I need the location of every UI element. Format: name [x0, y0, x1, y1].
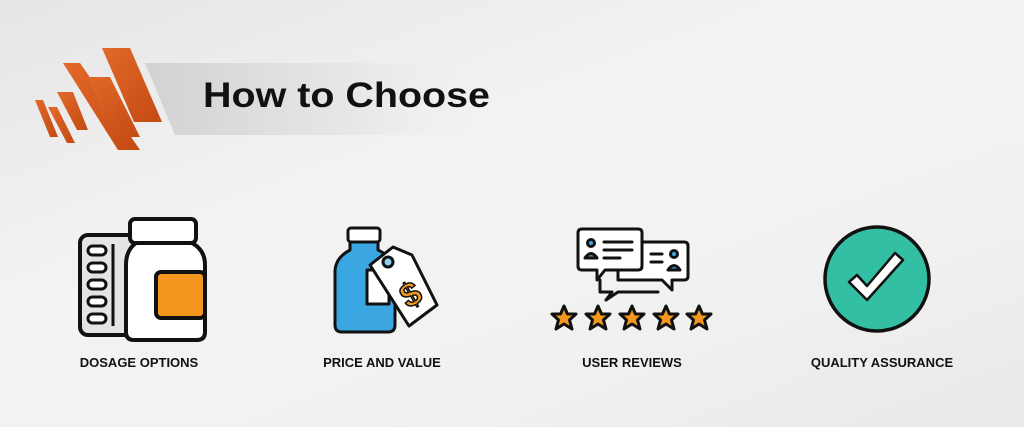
icon: price and value: $ — [393, 274, 429, 316]
icon: price and value — [335, 228, 437, 332]
label: dosage options: DOSAGE OPTIONS — [80, 355, 199, 370]
title band — [145, 63, 500, 135]
label: quality assurance: QUALITY ASSURANCE — [811, 355, 953, 370]
logo: orange bars — [35, 48, 162, 150]
icon: five stars — [552, 306, 711, 329]
label: price and value: PRICE AND VALUE — [323, 355, 441, 370]
title: How to Choose — [203, 76, 490, 115]
label: user reviews: USER REVIEWS — [582, 355, 682, 370]
icon: quality assurance check — [825, 227, 929, 331]
icon: dosage options — [80, 219, 205, 340]
icon: user reviews — [578, 229, 688, 300]
